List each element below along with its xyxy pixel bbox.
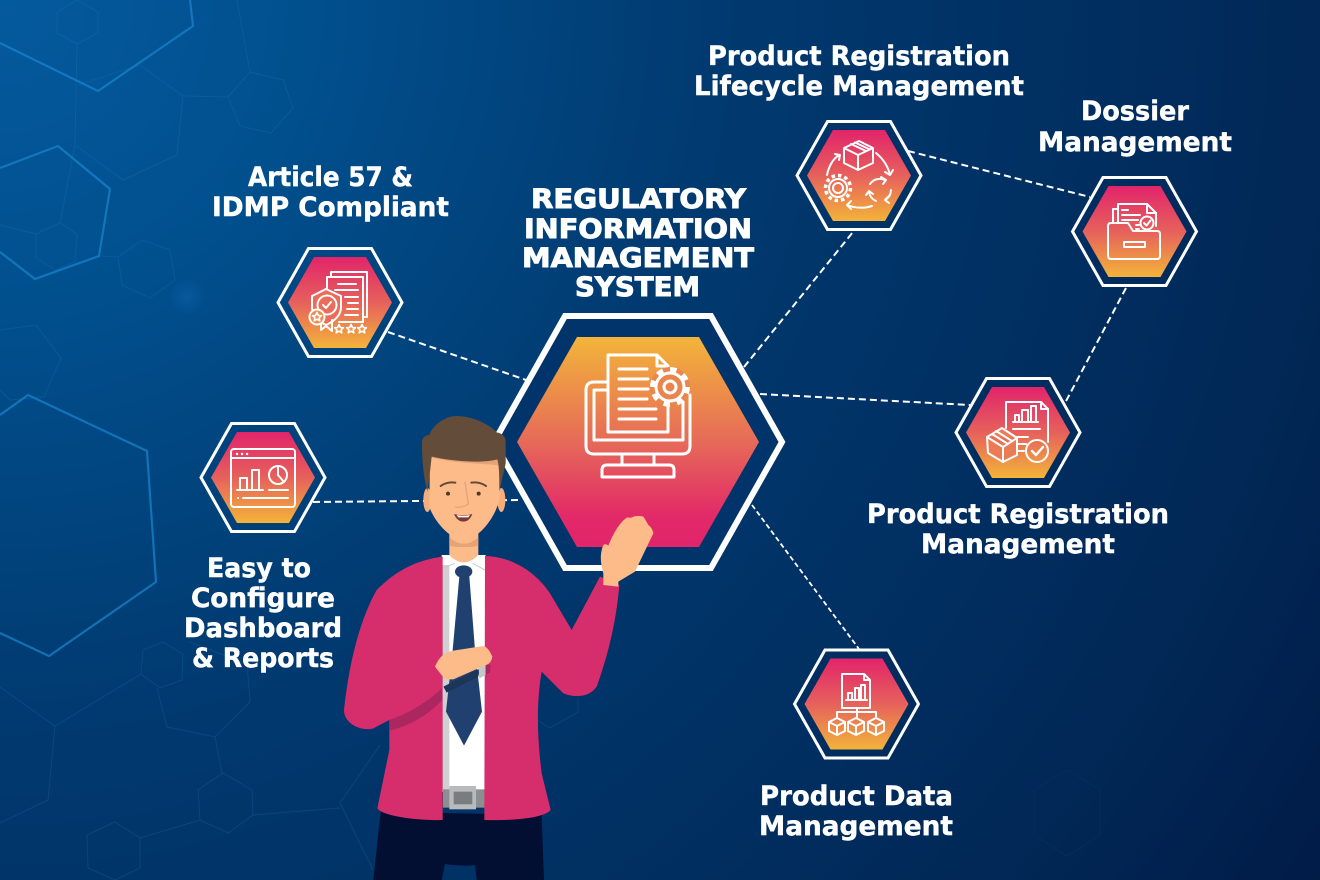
illustration: presenter man bbox=[344, 416, 653, 880]
icon: registration doc, box, check bbox=[987, 402, 1048, 462]
title: INFORMATION bbox=[524, 214, 752, 245]
icon: monitor with document and gear bbox=[586, 355, 690, 477]
label: Easy to Configure Dashboard & Reports: Configure bbox=[191, 583, 335, 614]
node: Product Registration Management bbox=[956, 378, 1080, 486]
label: Dossier Management: Dossier bbox=[1081, 96, 1190, 127]
title: SYSTEM bbox=[575, 272, 700, 303]
label: Product Registration Management bbox=[867, 499, 1169, 560]
label: Product Data Management bbox=[759, 781, 953, 842]
title: REGULATORY bbox=[531, 184, 746, 215]
node: Dossier bbox=[1072, 178, 1196, 286]
icon: certificate shield bbox=[310, 272, 367, 333]
label: Dossier Management: Management bbox=[1038, 127, 1232, 158]
label: Product Registration Lifecycle Management: Lifecycle Management bbox=[694, 71, 1024, 102]
node: Product Registration Lifecycle bbox=[797, 122, 921, 230]
label: Easy to Configure Dashboard & Reports bbox=[184, 553, 342, 674]
label: Article 57 & IDMP Compliant: IDMP Compliant bbox=[212, 192, 449, 223]
label: Dossier Management bbox=[1038, 96, 1232, 158]
label: Easy to Configure Dashboard & Reports: Dashboard bbox=[184, 613, 342, 644]
label: Product Registration Lifecycle Management bbox=[694, 41, 1024, 102]
label: Easy to Configure Dashboard & Reports: & Reports bbox=[192, 643, 334, 674]
label: Article 57 & IDMP Compliant: Article 57 & bbox=[248, 162, 413, 193]
node: Product Data Management bbox=[794, 650, 918, 758]
title: MANAGEMENT bbox=[522, 243, 755, 274]
icon: data doc and cubes bbox=[829, 674, 884, 735]
node: Dashboard bbox=[201, 424, 325, 532]
label: Product Data Management: Management bbox=[759, 811, 953, 842]
icon: dossier folder bbox=[1108, 204, 1160, 259]
label: Product Registration Management: Management bbox=[921, 529, 1115, 560]
icon: dashboard window bbox=[231, 449, 295, 507]
label: Product Data Management: Product Data bbox=[760, 781, 953, 812]
label: Easy to Configure Dashboard & Reports: Easy to bbox=[207, 553, 311, 584]
node: Article 57 & IDMP bbox=[278, 248, 402, 356]
label: Product Registration Management: Product Registration bbox=[867, 499, 1169, 530]
icon: lifecycle box and gears bbox=[826, 141, 893, 209]
connector lines bbox=[313, 151, 1126, 649]
central hexagon bbox=[494, 316, 782, 568]
label: Article 57 & IDMP Compliant bbox=[212, 162, 449, 223]
label: Product Registration Lifecycle Management: Product Registration bbox=[708, 41, 1010, 72]
title bbox=[522, 184, 755, 303]
